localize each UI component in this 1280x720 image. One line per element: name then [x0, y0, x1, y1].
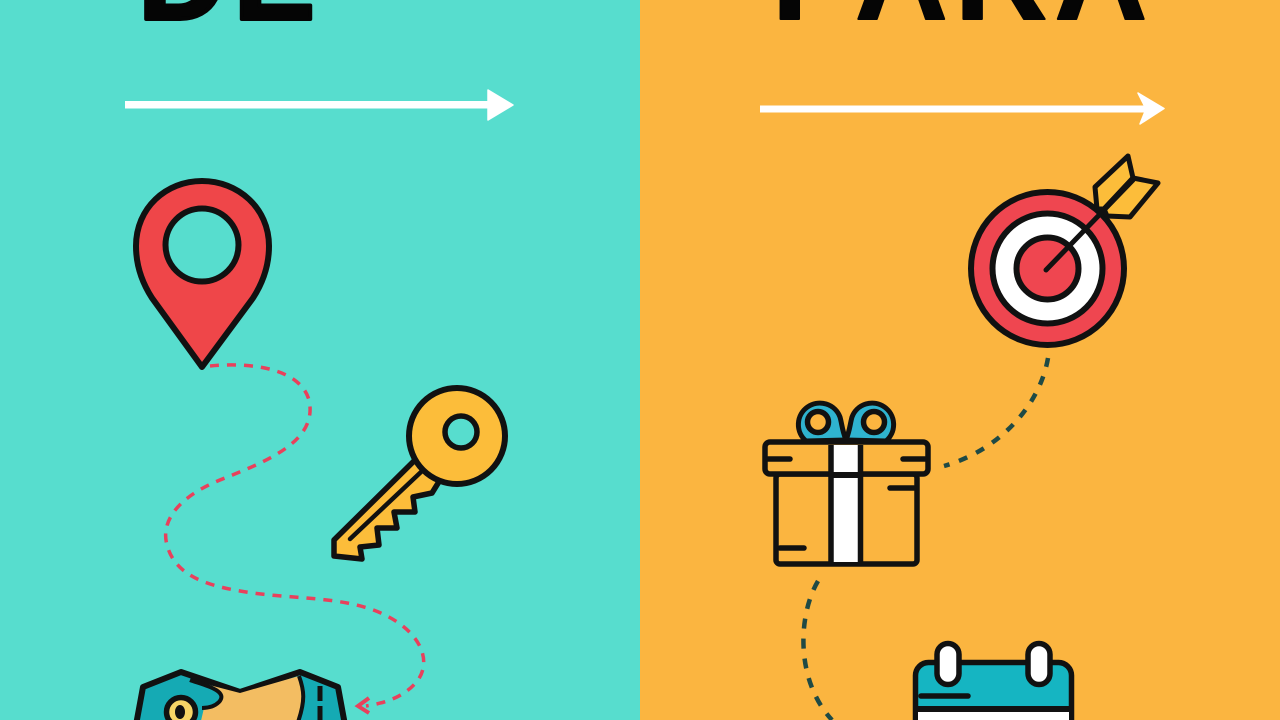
icon: location pin: [136, 181, 269, 367]
dashed route: pin to map: [166, 365, 424, 713]
dashed route: target to gift: [944, 358, 1048, 466]
icon: map: [136, 672, 345, 720]
panel: DE (teal): [0, 0, 640, 720]
arrow: PARA direction: [760, 93, 1164, 124]
icon: target with arrow: [971, 156, 1158, 345]
icon: calendar: [916, 644, 1072, 720]
panel: PARA (orange): [640, 0, 1280, 720]
dashed route: gift to calendar: [803, 581, 832, 720]
icon: gift box: [765, 403, 928, 564]
icon: key: [334, 388, 505, 559]
arrow: DE direction: [125, 90, 513, 120]
